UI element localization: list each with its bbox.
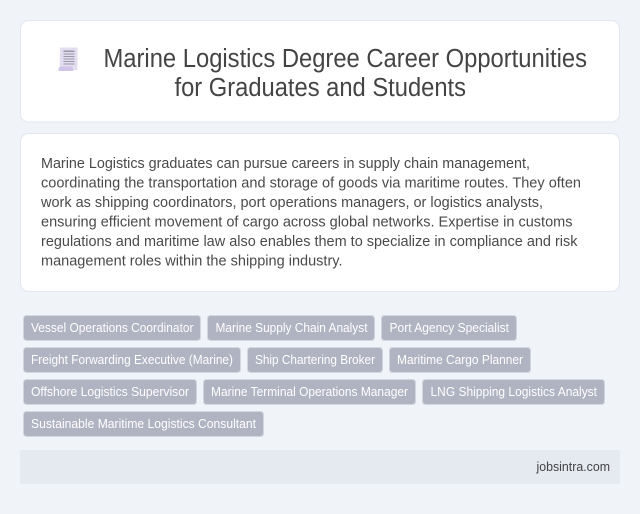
tag: Sustainable Maritime Logistics Consultant (24, 412, 264, 436)
tag: Marine Supply Chain Analyst: Marine Supply Chain Analyst (216, 320, 368, 335)
text block: description paragraph: Marine Logistics graduates can pursue careers in supply chain management, (41, 156, 530, 172)
text block: description paragraph: regulations and maritime law also enables them to specialize in compliance and risk (41, 234, 578, 250)
footer (20, 450, 620, 484)
title (104, 45, 587, 102)
tag: Ship Chartering Broker (248, 348, 382, 372)
tag: Ship Chartering Broker: Ship Chartering Broker (255, 352, 376, 367)
tag: Vessel Operations Coordinator: Vessel Operations Coordinator (31, 320, 194, 335)
icon: document scroll (58, 48, 78, 71)
text block: description paragraph: work as shipping coordinators, port operations managers, or logistics analysts, (40, 195, 543, 211)
tag: Offshore Logistics Supervisor (24, 380, 196, 404)
title: for Graduates and Students (174, 74, 466, 102)
text block: description paragraph: management roles within the shipping industry. (41, 254, 342, 270)
tag: Marine Terminal Operations Manager (204, 380, 416, 404)
tag: Freight Forwarding Executive (Marine) (24, 348, 240, 372)
text block: description paragraph: ensuring efficient movement of cargo across global networks. Expertise in customs (41, 214, 572, 230)
tag: Marine Terminal Operations Manager: Marine Terminal Operations Manager (211, 384, 409, 399)
panel: header card (20, 20, 620, 122)
tag: Offshore Logistics Supervisor: Offshore Logistics Supervisor (31, 384, 190, 399)
tag: Port Agency Specialist: Port Agency Specialist (390, 320, 509, 335)
career tags (24, 316, 604, 436)
tag: Freight Forwarding Executive (Marine): Freight Forwarding Executive (Marine) (31, 352, 233, 367)
tag: Marine Supply Chain Analyst (208, 316, 374, 340)
tag: LNG Shipping Logistics Analyst: LNG Shipping Logistics Analyst (430, 384, 597, 399)
tag: Maritime Cargo Planner: Maritime Cargo Planner (397, 352, 524, 367)
tag: Maritime Cargo Planner (390, 348, 530, 372)
tag: Port Agency Specialist (382, 316, 516, 340)
text block: description paragraph (40, 156, 581, 270)
panel: description (20, 134, 620, 292)
title: Marine Logistics Degree Career Opportunities (104, 45, 587, 73)
tag: Sustainable Maritime Logistics Consultant: Sustainable Maritime Logistics Consultant (31, 416, 256, 431)
tag: Vessel Operations Coordinator (24, 316, 200, 340)
text block: description paragraph: coordinating the transportation and storage of goods via maritime routes. They often (41, 176, 581, 192)
tag: LNG Shipping Logistics Analyst (422, 380, 604, 404)
footer source text: jobsintra.com (536, 459, 610, 474)
